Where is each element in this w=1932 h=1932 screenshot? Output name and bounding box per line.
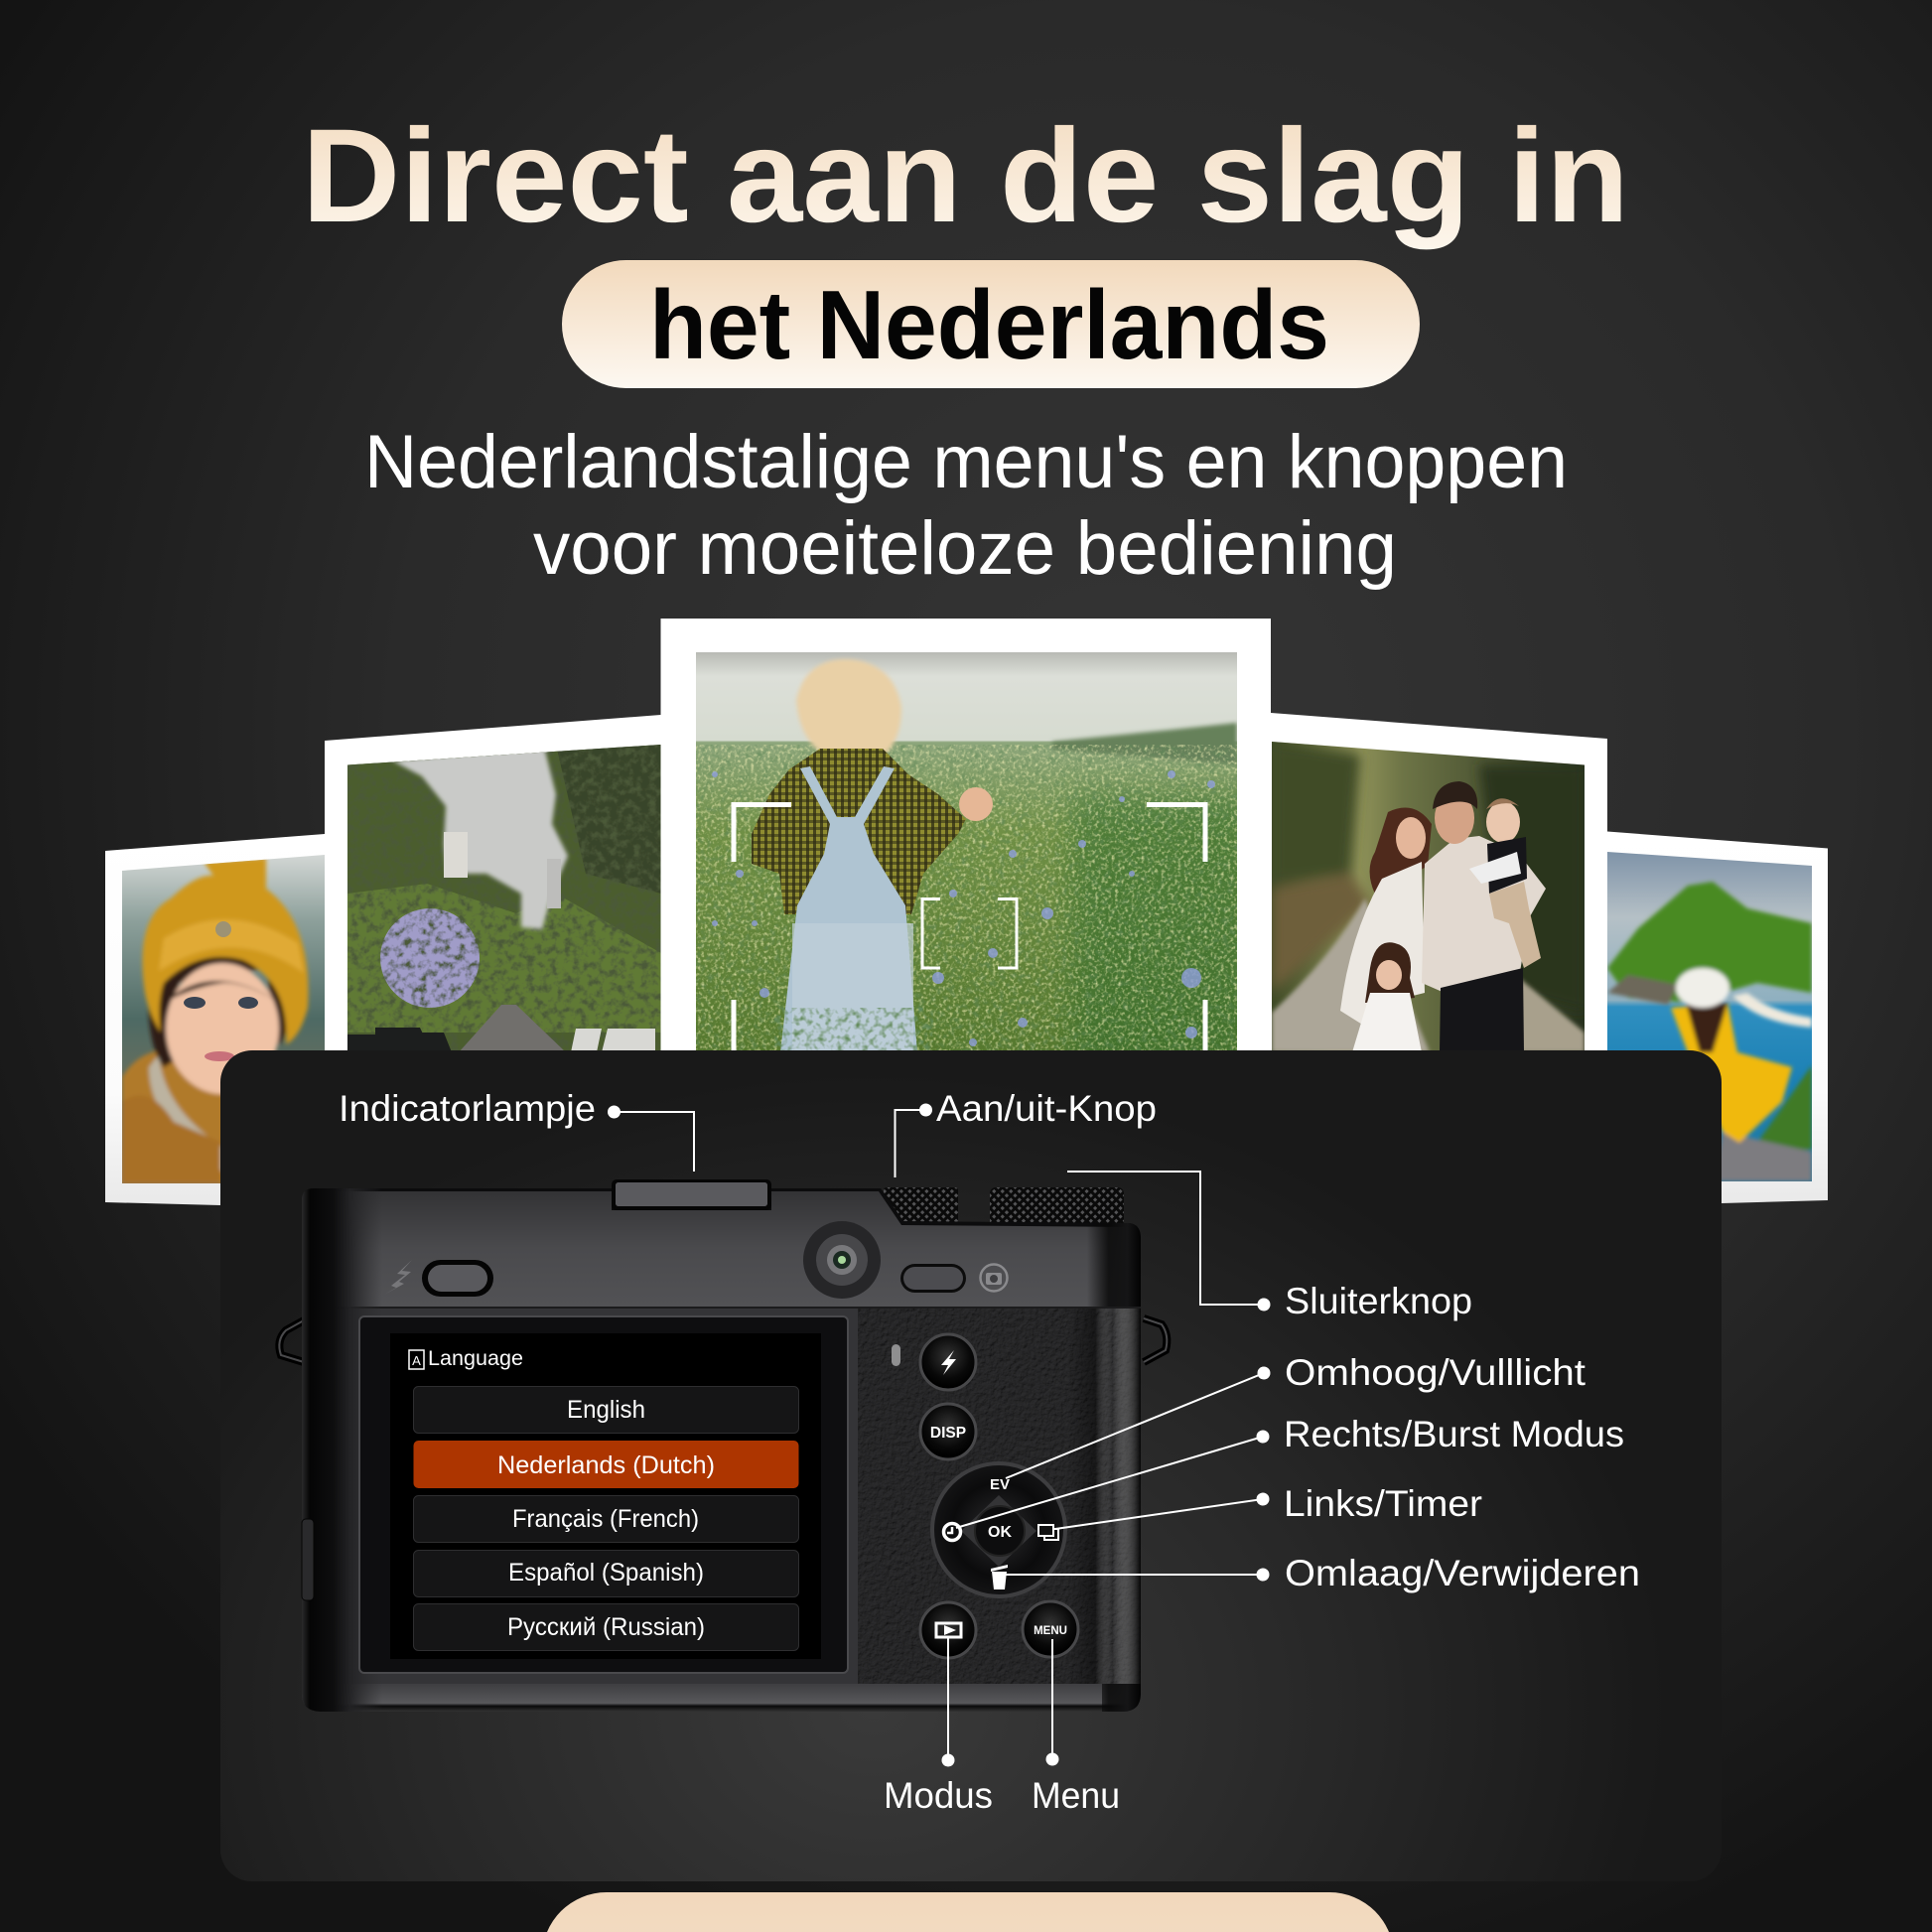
callout: Sluiterknop	[1067, 1172, 1472, 1321]
callout: Omlaag/Verwijderen: Omlaag/Verwijderen	[1285, 1553, 1640, 1593]
hot shoe	[612, 1179, 771, 1210]
sky gap	[392, 747, 568, 929]
callout: Indicatorlampje	[339, 1088, 694, 1172]
menu row: Spanish: Español (Spanish)	[508, 1559, 704, 1587]
top plate	[302, 1191, 1141, 1307]
subtitle	[364, 420, 1568, 591]
directional pad	[932, 1463, 1065, 1596]
flash icon	[384, 1260, 412, 1295]
directional pad: OK	[988, 1524, 1012, 1541]
callout: Menu: Menu	[1032, 1775, 1120, 1816]
callout: Omhoog/Vulllicht: Omhoog/Vulllicht	[1285, 1352, 1587, 1393]
zoom rocker button	[900, 1264, 966, 1293]
language icon	[409, 1350, 424, 1369]
DISP button	[920, 1404, 976, 1459]
callout: Rechts/Burst Modus: Rechts/Burst Modus	[1284, 1414, 1624, 1454]
highlighted pill heading: het Nederlands	[649, 270, 1329, 379]
knurled dials	[884, 1187, 1124, 1227]
trash icon	[991, 1565, 1008, 1589]
bottom strip	[302, 1684, 1141, 1712]
status LED	[892, 1344, 900, 1366]
camera illustration	[279, 1179, 1167, 1712]
camera shell	[302, 1188, 1141, 1712]
menu row: English	[413, 1386, 798, 1434]
callout: Modus: Modus	[884, 1775, 993, 1816]
left grip shading	[302, 1188, 383, 1712]
menu button: MENU	[1034, 1625, 1067, 1637]
flash release button	[422, 1260, 493, 1297]
strap lugs	[279, 1318, 1167, 1362]
callout: Menu	[1032, 1639, 1120, 1816]
callout: Indicatorlampje: Indicatorlampje	[339, 1088, 596, 1129]
side button	[302, 1519, 314, 1600]
highlighted pill heading	[562, 260, 1420, 388]
camera body	[302, 1188, 1141, 1712]
child figure	[752, 659, 993, 1052]
flash button	[920, 1334, 976, 1390]
leather grip	[858, 1309, 1141, 1684]
menu row: Nederlands selected: Nederlands (Dutch)	[497, 1451, 715, 1479]
menu row: Russian: Русский (Russian)	[507, 1613, 705, 1641]
menu row: Spanish	[413, 1551, 798, 1596]
menu button	[1023, 1601, 1078, 1657]
callout: Omhoog/Vulllicht	[1006, 1352, 1587, 1478]
menu row: French	[413, 1495, 798, 1543]
back lower section	[302, 1309, 858, 1686]
timer icon	[943, 1523, 961, 1541]
menu row: Nederlands selected	[413, 1441, 798, 1488]
callout: Modus	[884, 1636, 993, 1816]
burst icon	[1038, 1525, 1058, 1540]
viewfinder focus brackets	[734, 804, 1205, 1052]
callout: Rechts/Burst Modus	[956, 1414, 1624, 1528]
DISP button: DISP	[930, 1425, 966, 1442]
photo card: child in flower field with focus brackets	[661, 619, 1271, 1072]
language heading: Language	[428, 1347, 523, 1370]
language icon: A	[412, 1353, 421, 1368]
callout: Sluiterknop: Sluiterknop	[1285, 1281, 1472, 1321]
blue flowers	[712, 770, 1215, 1046]
photo card: island and woman in yellow dress	[1607, 832, 1828, 1203]
bottom cream banner	[542, 1892, 1394, 1932]
photo card: girl with yellow hat	[105, 834, 325, 1205]
callout: Omlaag/Verwijderen	[1006, 1553, 1640, 1593]
directional pad: EV	[990, 1476, 1010, 1493]
title: Direct aan de slag in	[302, 102, 1629, 250]
subtitle: Nederlandstalige menu's en knoppen	[364, 420, 1568, 504]
callout: Aan/uit-Knop	[896, 1088, 1157, 1177]
menu row: Russian	[413, 1604, 798, 1650]
playback button	[920, 1602, 976, 1658]
camera switch icon	[981, 1265, 1007, 1291]
viewfinder eyepiece	[803, 1221, 881, 1299]
panel: camera controls	[220, 1050, 1722, 1881]
callout: Aan/uit-Knop: Aan/uit-Knop	[936, 1088, 1157, 1129]
menu row: French: Français (French)	[512, 1505, 699, 1533]
photo card: family portrait	[1271, 713, 1607, 1052]
LCD screen	[359, 1316, 848, 1673]
right grip shading	[1087, 1223, 1141, 1307]
menu row: English: English	[567, 1396, 645, 1424]
subtitle: voor moeiteloze bediening	[533, 506, 1397, 591]
callout: Links/Timer: Links/Timer	[1284, 1483, 1482, 1524]
photo card: tree-lined street	[325, 715, 661, 1052]
callout: Links/Timer	[1055, 1483, 1482, 1529]
